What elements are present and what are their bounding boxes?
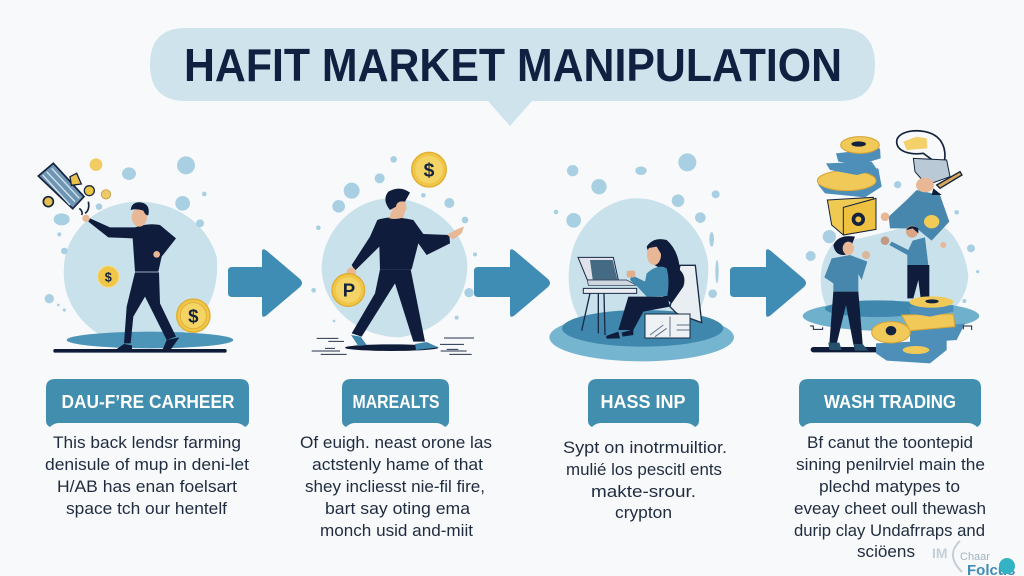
figure: standing trader left xyxy=(824,236,870,351)
description 2: bart say oting ema xyxy=(325,499,471,518)
panel: illustration 2, walking man with coins xyxy=(311,152,477,354)
badge: step 4 xyxy=(799,379,981,427)
description 4: Bf canut the toontepid xyxy=(807,433,973,452)
icon: broken gadget xyxy=(38,158,111,215)
description 2 xyxy=(300,433,492,540)
description 3: Sypt on inotrmuiltior. xyxy=(563,438,727,457)
description 4: durip clay Undafrraps and xyxy=(794,521,985,540)
badge: step 3 xyxy=(588,379,699,427)
panel: step 1 text xyxy=(45,379,249,518)
figure: woman xyxy=(606,239,684,339)
badge: step 1: DAU-F’RE CARHEER xyxy=(62,392,235,412)
icon: held coin xyxy=(332,274,365,306)
ground shadow and motion lines xyxy=(312,338,474,354)
icon: large coin xyxy=(177,299,210,332)
icon: small coin xyxy=(98,266,119,287)
badge: step 2: MAREALTS xyxy=(352,392,440,412)
description 1: denisule of mup in deni-let xyxy=(45,455,249,474)
chair and box xyxy=(645,265,702,338)
description 2: monch usid and-miit xyxy=(320,521,473,540)
icon: top coin: $ xyxy=(424,161,435,182)
panel: illustration 3, woman at laptop xyxy=(549,153,734,361)
badge: step 1 xyxy=(46,379,249,427)
description 4: eveay cheet oull thewash xyxy=(794,499,986,518)
description 2: Of euigh. neast orone las xyxy=(300,433,492,452)
icon: held coin: P xyxy=(343,280,355,301)
panel: step 4 text xyxy=(794,379,986,561)
arrow 1 xyxy=(228,249,302,317)
ground platform xyxy=(549,310,734,361)
description 2: shey incliesst nie-fil fire, xyxy=(305,477,485,496)
panel: step 3 text xyxy=(563,379,727,522)
arrow 3 xyxy=(730,249,806,317)
panel: step 2 text xyxy=(300,379,492,540)
watermark logo xyxy=(932,541,1015,576)
description 1: H/AB has enan foelsart xyxy=(57,477,237,496)
description 3 xyxy=(563,438,727,522)
description 1 xyxy=(45,433,249,518)
figure: standing trader right xyxy=(881,226,929,298)
description 3: makte-srour. xyxy=(591,482,696,501)
description 3: crypton xyxy=(615,503,672,522)
badge: step 4: WASH TRADING xyxy=(824,392,956,412)
ground platform xyxy=(803,300,979,352)
watermark logo: IM xyxy=(932,545,948,561)
watermark logo: Chaar xyxy=(960,551,990,563)
figure: man xyxy=(82,202,179,351)
figure: floating trader with speech bubble xyxy=(881,131,962,248)
icon: top coin xyxy=(412,152,446,187)
badge: step 2 xyxy=(342,379,449,427)
description 4: plechd matypes to xyxy=(819,477,960,496)
description 1: This back lendsr farming xyxy=(53,433,241,452)
title: HAFIT MARKET MANIPULATION xyxy=(184,39,842,91)
coin pile xyxy=(872,296,965,363)
panel: illustration 1, man with coins xyxy=(38,156,233,353)
coin stack and crate xyxy=(817,137,882,235)
description 4: sciöens xyxy=(857,542,915,561)
description 4: sining penilrviel main the xyxy=(796,455,985,474)
desk and laptop xyxy=(578,257,637,335)
icon: large coin: $ xyxy=(188,306,199,327)
panel: illustration 4, traders and coin stacks xyxy=(803,131,979,363)
description 4 xyxy=(794,433,986,561)
description 1: space tch our hentelf xyxy=(66,499,227,518)
arrow 2 xyxy=(474,249,550,317)
icon: small coin: $ xyxy=(105,270,112,284)
description 3: mulié los pescitl ents xyxy=(566,460,722,479)
title banner xyxy=(150,28,875,126)
figure: man xyxy=(347,189,464,350)
description 2: actstenly hame of that xyxy=(312,455,483,474)
badge: step 3: HASS INP xyxy=(600,392,686,412)
